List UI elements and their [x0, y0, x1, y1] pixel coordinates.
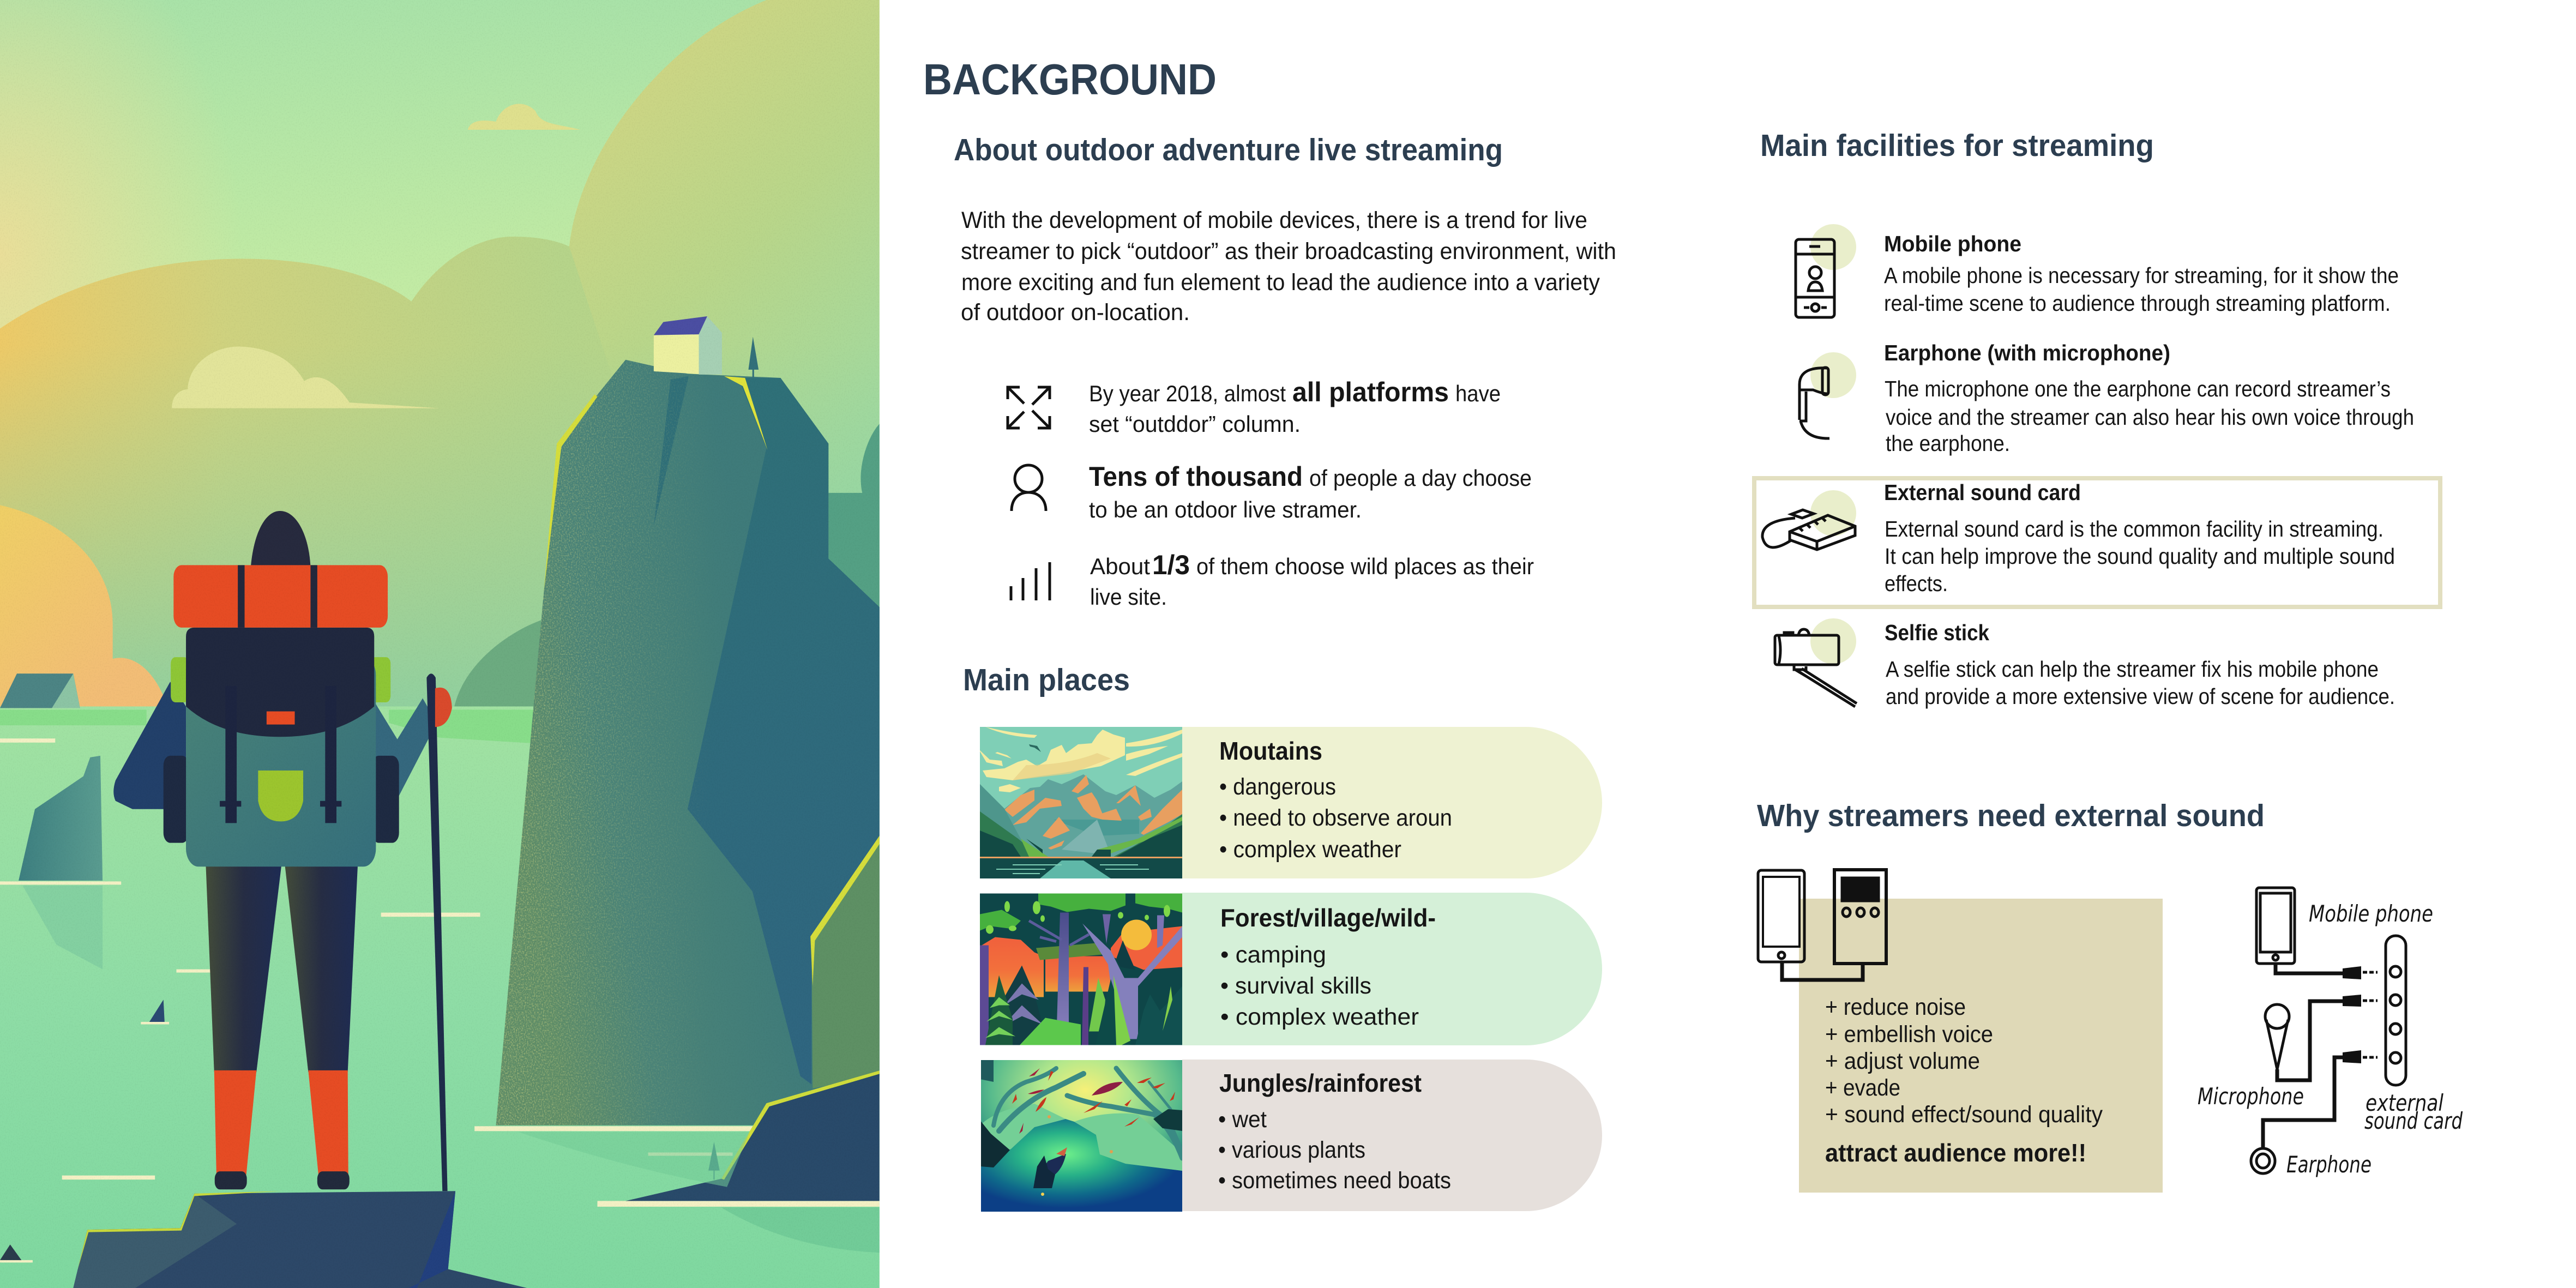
foreground ledge	[73, 1191, 527, 1288]
section: main facilities	[1754, 128, 2440, 709]
stat: all platforms: set “outddor” column.	[1089, 411, 1301, 437]
stat: tens of thousand: to be an otdoor live stramer.	[1089, 497, 1362, 522]
section: why streamers need external sound	[1757, 798, 2463, 1193]
list: benefits: + adjust volume	[1825, 1048, 1980, 1074]
arm left	[113, 682, 186, 809]
icon: expand arrows	[1008, 387, 1050, 428]
text: jungle: • sometimes need boats	[1218, 1167, 1451, 1194]
icon: earphone	[1799, 352, 1856, 438]
text: mobile phone: Mobile phone	[1884, 231, 2021, 256]
text: selfie stick: A selfie stick can help the streamer fix his mobile phone	[1886, 657, 2379, 682]
arm right with pole hand	[375, 698, 437, 801]
text: mountains: • dangerous	[1219, 774, 1336, 800]
text: mobile phone: real-time scene to audience through streaming platform.	[1884, 291, 2391, 316]
text: forest: • camping	[1220, 942, 1326, 968]
text: mountains: • need to observe aroun	[1219, 805, 1452, 831]
list: benefits: + reduce noise	[1825, 994, 1966, 1020]
text: sound card	[1884, 480, 2395, 596]
foreground right rocks	[519, 835, 880, 1253]
text: mountains	[1219, 737, 1452, 863]
handwritten labels: Microphone	[2198, 1083, 2304, 1110]
text: selfie stick: Selfie stick	[1885, 620, 1989, 645]
icon: selfie stick	[1775, 618, 1857, 707]
thumbnail: jungle	[981, 1060, 1182, 1212]
thumbnail: forest	[980, 893, 1182, 1045]
distant tree-covered hill	[454, 620, 541, 712]
intro paragraph: With the development of mobile devices, there is a trend for live	[961, 207, 1587, 233]
boots	[214, 1070, 256, 1175]
text: earphone: voice and the streamer can also hear his own voice through	[1886, 405, 2414, 430]
handwritten labels: external	[2366, 1090, 2443, 1116]
text: earphone: the earphone.	[1886, 431, 2010, 456]
stat: one third: About	[1090, 553, 1150, 579]
illustration: hiker looking over a lake	[0, 0, 880, 1288]
place card: jungle	[980, 1060, 1602, 1212]
hiker	[113, 511, 452, 1191]
house and tree on the cliff	[654, 316, 759, 378]
cloud: middle	[172, 346, 440, 408]
text: selfie stick	[1885, 620, 2395, 709]
text: mobile phone	[1884, 231, 2399, 316]
text: selfie stick: and provide a more extensive view of scene for audience.	[1886, 684, 2395, 709]
hood	[251, 511, 310, 567]
backpack	[186, 657, 376, 866]
icon: person	[1012, 465, 1046, 511]
highlight box: external sound card	[1754, 478, 2440, 607]
legs	[206, 863, 282, 1072]
icon: phone connected to sound card	[1758, 870, 1886, 980]
intro paragraph: streamer to pick “outdoor” as their broadcasting environment, with	[961, 238, 1616, 264]
stat: tens of thousand: of people a day choose	[1309, 465, 1532, 491]
list: benefits: + sound effect/sound quality	[1825, 1102, 2103, 1128]
text: mobile phone: A mobile phone is necessary for streaming, for it show the	[1884, 263, 2399, 288]
text: jungle	[1218, 1069, 1451, 1194]
heading: Main places	[963, 663, 1130, 697]
text: jungle: • wet	[1218, 1106, 1267, 1133]
text: sound card: It can help improve the sound quality and multiple sound	[1885, 544, 2395, 569]
trekking pole	[426, 673, 448, 1191]
stat: tens of thousand: Tens of thousand	[1089, 461, 1303, 492]
intro paragraph: more exciting and fun element to lead the audience into a variety	[961, 269, 1600, 296]
text: forest: Forest/village/wild-	[1220, 904, 1436, 932]
stat: one third: 1/3	[1152, 550, 1190, 580]
panel: benefits	[1799, 899, 2163, 1193]
list: benefits: + evade	[1825, 1075, 1900, 1101]
section: about outdoor adventure live streaming	[954, 133, 1616, 610]
title: BACKGROUND	[923, 55, 1217, 104]
text: jungle: Jungles/rainforest	[1219, 1069, 1422, 1097]
sleeping roll	[173, 565, 388, 628]
text: earphone: The microphone one the earphone can record streamer’s	[1885, 376, 2391, 401]
place card: forest	[980, 893, 1602, 1045]
text: forest	[1220, 904, 1436, 1030]
stat: tens of thousand	[1089, 461, 1532, 522]
icon: bars	[1011, 562, 1050, 600]
text: sound card: External sound card is the common facility in streaming.	[1885, 516, 2384, 541]
text: sound card: External sound card	[1884, 480, 2081, 505]
heading: Main facilities for streaming	[1760, 128, 2154, 163]
stat: all platforms: By year 2018, almost	[1089, 381, 1286, 406]
icon: sound card	[1762, 490, 1856, 550]
list: benefits: attract audience more!!	[1825, 1139, 2086, 1167]
text: sound card: effects.	[1885, 571, 1948, 596]
list: benefits	[1825, 994, 2103, 1167]
place card: mountains	[980, 727, 1602, 878]
stat: one third: live site.	[1090, 584, 1167, 610]
section: main places	[963, 663, 1602, 1212]
small rock in water	[0, 756, 165, 1260]
stat: one third: of them choose wild places as their	[1196, 553, 1534, 579]
text: forest: • survival skills	[1220, 973, 1371, 999]
text: earphone	[1884, 340, 2414, 456]
text: jungle: • various plants	[1218, 1137, 1365, 1163]
stat: all platforms	[1089, 377, 1501, 437]
far right rock	[828, 423, 880, 657]
stat: all platforms: have	[1455, 381, 1501, 406]
intro paragraph: of outdoor on-location.	[961, 299, 1190, 326]
text: mountains: Moutains	[1219, 737, 1322, 765]
handwritten labels: Mobile phone	[2309, 900, 2433, 927]
text: earphone: Earphone (with microphone)	[1884, 340, 2170, 365]
text: forest: • complex weather	[1220, 1004, 1419, 1030]
list: benefits: + embellish voice	[1825, 1021, 1993, 1048]
handwritten labels: Earphone	[2286, 1151, 2372, 1178]
stat: one third	[1090, 550, 1534, 610]
thumbnail: mountains	[980, 727, 1182, 878]
icon: mobile phone	[1796, 224, 1856, 317]
handwritten labels: sound card	[2364, 1108, 2463, 1134]
heading: Why streamers need external sound	[1757, 798, 2265, 833]
cloud: upper sky	[468, 104, 581, 130]
diagram: connecting devices to the external sound card	[2198, 888, 2463, 1178]
stat: all platforms: all platforms	[1292, 377, 1449, 407]
handwritten labels	[2198, 900, 2463, 1178]
large cliff	[490, 353, 880, 1134]
heading: About outdoor adventure live streaming	[954, 133, 1503, 167]
text: mountains: • complex weather	[1219, 836, 1401, 863]
intro paragraph	[961, 207, 1616, 326]
